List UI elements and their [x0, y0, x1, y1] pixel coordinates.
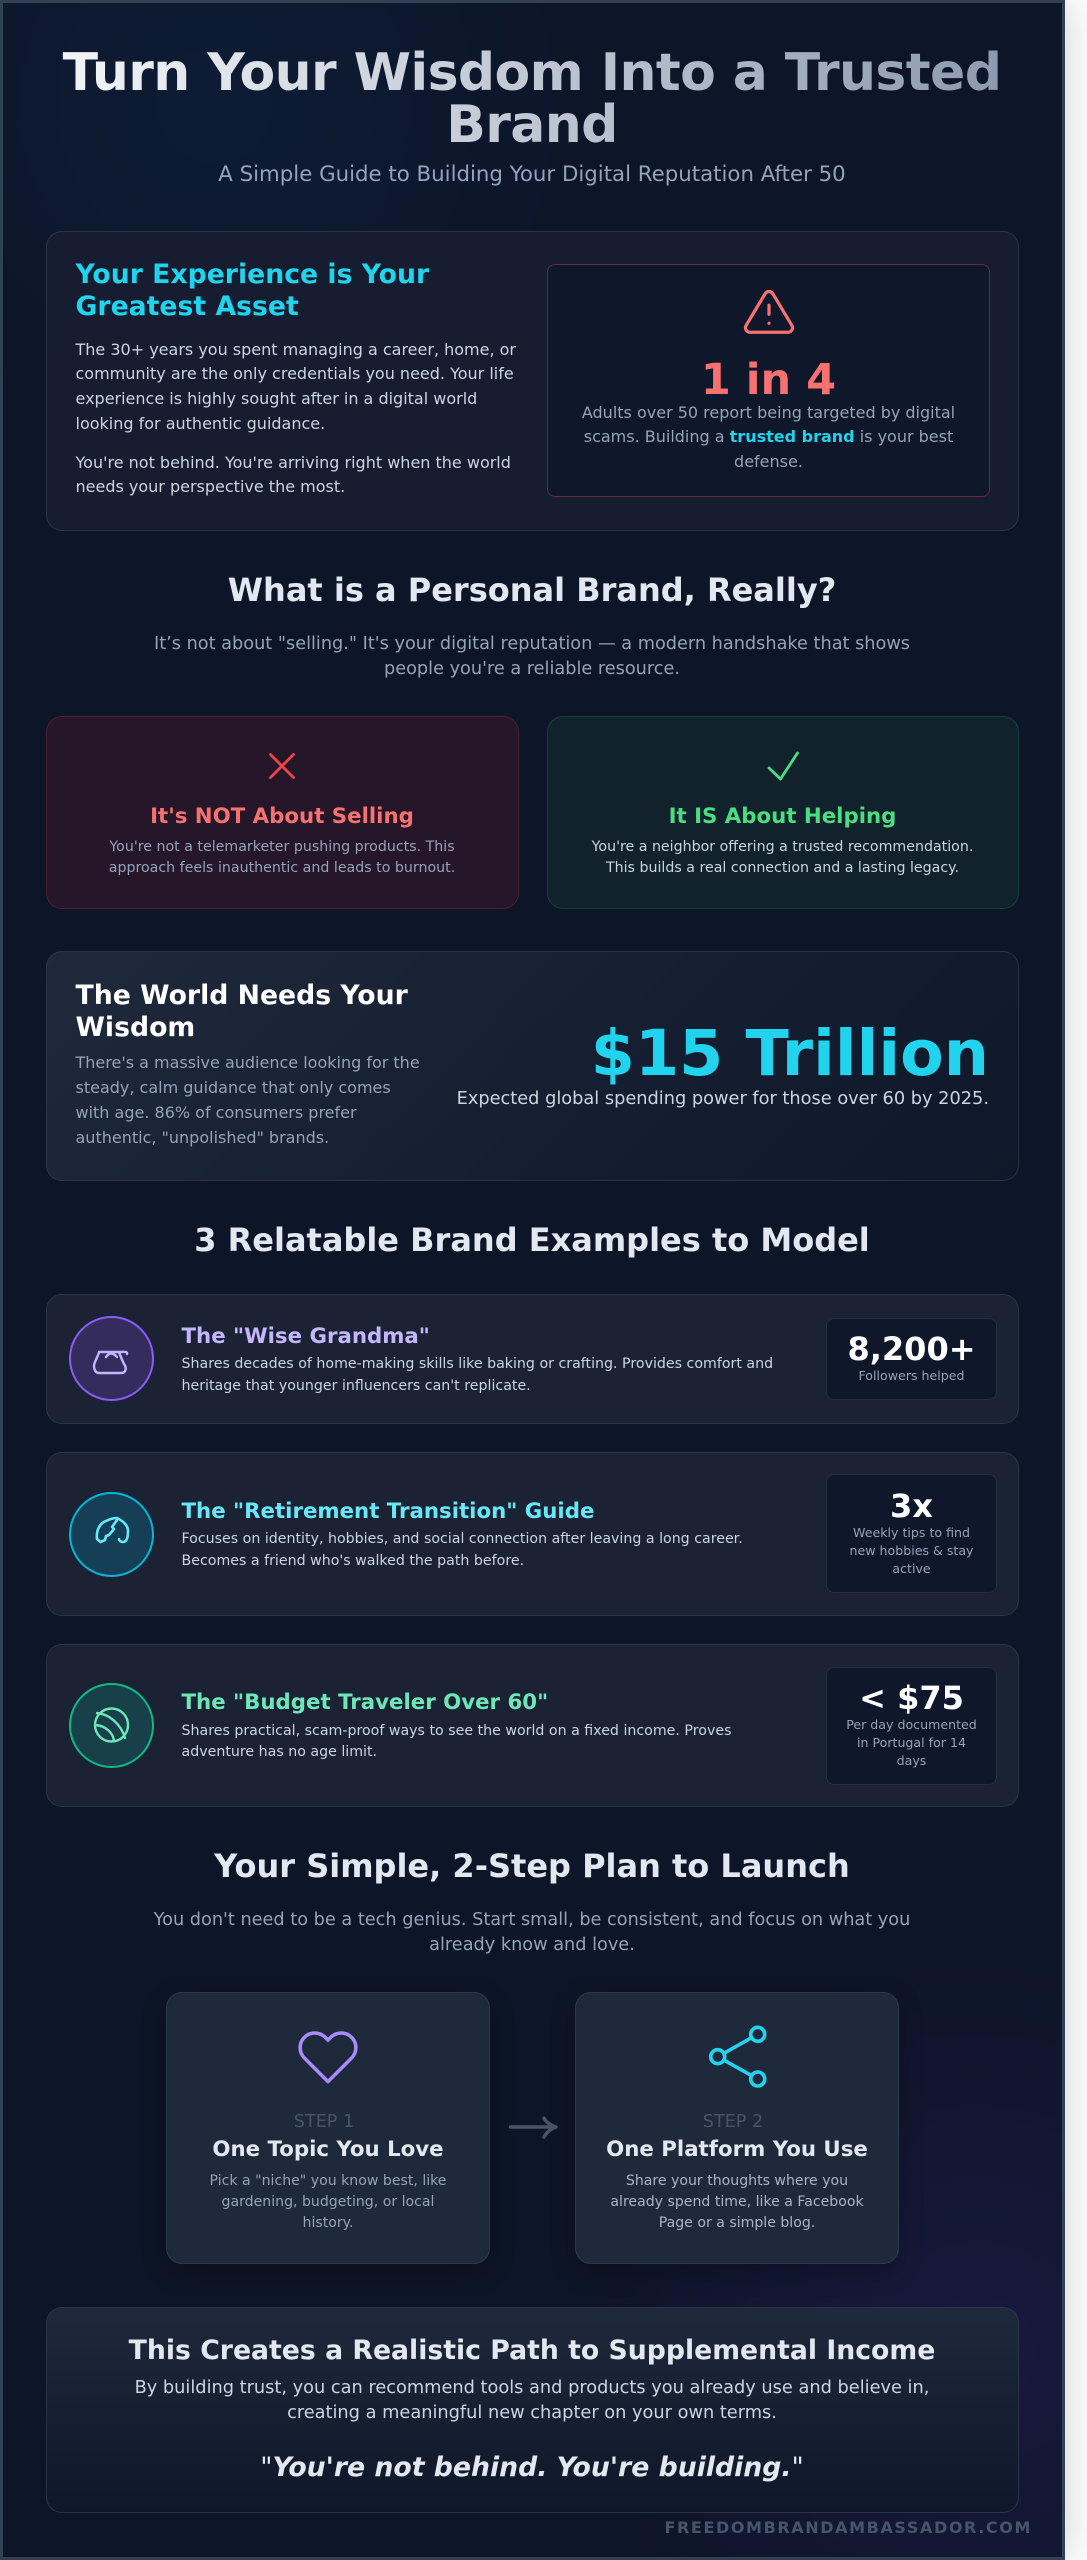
world text: with age. 86% of consumers prefer — [76, 1103, 357, 1122]
panel: about helping — [547, 716, 1019, 909]
stat value: 3x — [890, 1487, 933, 1525]
stat label: new hobbies & stay — [849, 1543, 974, 1558]
text: not selling: approach feels inauthentic and leads to burnout. — [109, 860, 455, 876]
stat label: days — [897, 1753, 926, 1768]
personal brand intro — [154, 634, 910, 678]
text: helping: You're a neighbor offering a trusted recommendation. — [592, 838, 973, 854]
panel: step 1 — [166, 1992, 490, 2264]
statistic caption — [582, 403, 955, 471]
experience closing text: needs your perspective the most. — [76, 477, 345, 496]
icon: compass — [69, 1492, 154, 1577]
personal brand intro: It’s not about "selling." It's your digital reputation — a modern handshake that shows — [154, 634, 910, 654]
panel: supplemental income — [46, 2306, 1019, 2513]
step label: STEP 2 — [703, 2112, 763, 2132]
heading: personal brand: What is a Personal Brand, Really? — [228, 571, 836, 609]
step text: Page or a simple blog. — [659, 2215, 815, 2231]
text: budget traveler: adventure has no age limit. — [182, 1744, 377, 1760]
experience heading: Greatest Asset — [76, 291, 299, 322]
experience heading — [75, 259, 430, 322]
heading: brand examples: 3 Relatable Brand Examples to Model — [194, 1221, 870, 1259]
panel: experience — [46, 231, 1019, 531]
step text — [610, 2172, 864, 2231]
icon: globe — [69, 1683, 154, 1768]
icon: cross — [269, 753, 295, 779]
stat label: Followers helped — [859, 1368, 964, 1383]
title: wise grandma: The "Wise Grandma" — [182, 1324, 430, 1348]
step text: already spend time, like a Facebook — [610, 2194, 864, 2210]
statistic caption: Expected global spending power for those over 60 by 2025. — [457, 1088, 989, 1108]
icon: check — [768, 752, 799, 780]
stat label: Per day documented — [846, 1717, 977, 1732]
text: retirement transition: Becomes a friend who's walked the path before. — [182, 1553, 524, 1569]
text: retirement transition: Focuses on identity, hobbies, and social connection after leaving a long career. — [182, 1531, 743, 1547]
title: Brand — [446, 95, 618, 155]
icon: bread — [69, 1316, 154, 1401]
text: not selling — [109, 838, 455, 876]
step text — [210, 2172, 446, 2231]
plan intro: You don't need to be a tech genius. Start small, be consistent, and focus on what you — [154, 1910, 910, 1930]
world text — [75, 1053, 420, 1147]
panel: wise grandma — [46, 1294, 1019, 1424]
world heading: The World Needs Your — [76, 980, 408, 1011]
world heading — [76, 980, 408, 1043]
world text: There's a massive audience looking for the — [76, 1053, 420, 1072]
title: budget traveler: The "Budget Traveler Over 60" — [182, 1690, 548, 1715]
stat box: per day — [826, 1666, 997, 1784]
heading: not selling: It's NOT About Selling — [150, 804, 414, 829]
panel: retirement transition — [46, 1452, 1019, 1616]
text: not selling: You're not a telemarketer pushing products. This — [109, 838, 455, 854]
heading: two-step plan: Your Simple, 2-Step Plan to Launch — [214, 1847, 850, 1885]
panel: not about selling — [46, 716, 518, 909]
stat label: active — [892, 1561, 931, 1576]
step text: Share your thoughts where you — [626, 2172, 848, 2188]
plan intro — [154, 1910, 910, 1954]
heading: helping: It IS About Helping — [669, 804, 896, 829]
text: wise grandma — [182, 1356, 773, 1394]
world text: authentic, "unpolished" brands. — [76, 1128, 329, 1147]
text: retirement transition — [182, 1531, 743, 1569]
stat box: followers — [826, 1318, 997, 1400]
title: Turn Your Wisdom Into a Trusted — [63, 43, 1001, 103]
statistic caption: scams. Building a trusted brand is your best — [584, 427, 953, 446]
text: wise grandma: heritage that younger influencers can't replicate. — [182, 1378, 531, 1394]
title — [0, 47, 1064, 151]
panel: step 2 — [575, 1992, 899, 2264]
plan intro: already know and love. — [429, 1934, 635, 1954]
experience text: experience is highly sought after in a digital world — [76, 389, 477, 408]
icon: warning triangle — [744, 290, 794, 334]
stat box: weekly tips — [826, 1474, 997, 1593]
experience text — [75, 340, 516, 433]
step title: One Topic You Love — [212, 2136, 444, 2162]
income heading: This Creates a Realistic Path to Supplemental Income — [129, 2334, 935, 2366]
statistic caption: defense. — [734, 452, 803, 471]
text: helping — [592, 838, 973, 876]
footer brand url: FREEDOMBRANDAMBASSADOR.COM — [664, 2518, 1032, 2537]
text: budget traveler — [182, 1723, 731, 1760]
callout: scam statistic — [547, 264, 990, 497]
text: wise grandma: Shares decades of home-making skills like baking or crafting. Provides comfort and — [182, 1356, 773, 1372]
experience text: looking for authentic guidance. — [76, 414, 325, 433]
subtitle: A Simple Guide to Building Your Digital Reputation After 50 — [218, 162, 846, 187]
stat value: < $75 — [859, 1679, 964, 1717]
stat label: in Portugal for 14 — [857, 1735, 966, 1750]
step title: One Platform You Use — [606, 2136, 868, 2162]
icon: heart — [298, 2031, 358, 2084]
experience closing text — [76, 453, 511, 496]
income text: creating a meaningful new chapter on your own terms. — [287, 2402, 777, 2422]
income text: By building trust, you can recommend tools and products you already use and believe in, — [135, 2378, 929, 2398]
title: retirement transition: The "Retirement Transition" Guide — [182, 1499, 594, 1524]
arrow: step 1 to step 2 — [508, 2116, 558, 2139]
personal brand intro: people you're a reliable resource. — [384, 658, 680, 678]
icon: share — [708, 2026, 766, 2088]
stat label — [849, 1525, 974, 1576]
statistic: 1 in 4: 1 in 4 — [701, 354, 836, 404]
income text — [135, 2378, 929, 2422]
experience text: community are the only credentials you need. Your life — [76, 364, 514, 383]
world text: steady, calm guidance that only comes — [76, 1078, 391, 1097]
step text: Pick a "niche" you know best, like — [210, 2172, 446, 2188]
statistic caption: Adults over 50 report being targeted by digital — [582, 403, 955, 422]
stat value: 8,200+ — [847, 1330, 976, 1368]
quote: "You're not behind. You're building." — [260, 2452, 804, 2482]
statistic: 15 trillion: $15 Trillion — [591, 1016, 989, 1090]
panel: the world needs your wisdom — [46, 951, 1019, 1180]
text: helping: This builds a real connection and a lasting legacy. — [606, 860, 959, 876]
step text: history. — [303, 2215, 353, 2231]
experience heading: Your Experience is Your — [76, 259, 429, 290]
world heading: Wisdom — [76, 1012, 195, 1043]
step text: gardening, budgeting, or local — [222, 2194, 434, 2210]
experience closing text: You're not behind. You're arriving right when the world — [76, 453, 511, 472]
step label: STEP 1 — [294, 2112, 354, 2132]
experience text: The 30+ years you spent managing a career, home, or — [76, 340, 516, 359]
panel: budget traveler — [46, 1644, 1019, 1807]
stat label — [846, 1717, 977, 1768]
text: budget traveler: Shares practical, scam-proof ways to see the world on a fixed income. Proves — [182, 1723, 731, 1739]
stat label: Weekly tips to find — [853, 1525, 970, 1540]
